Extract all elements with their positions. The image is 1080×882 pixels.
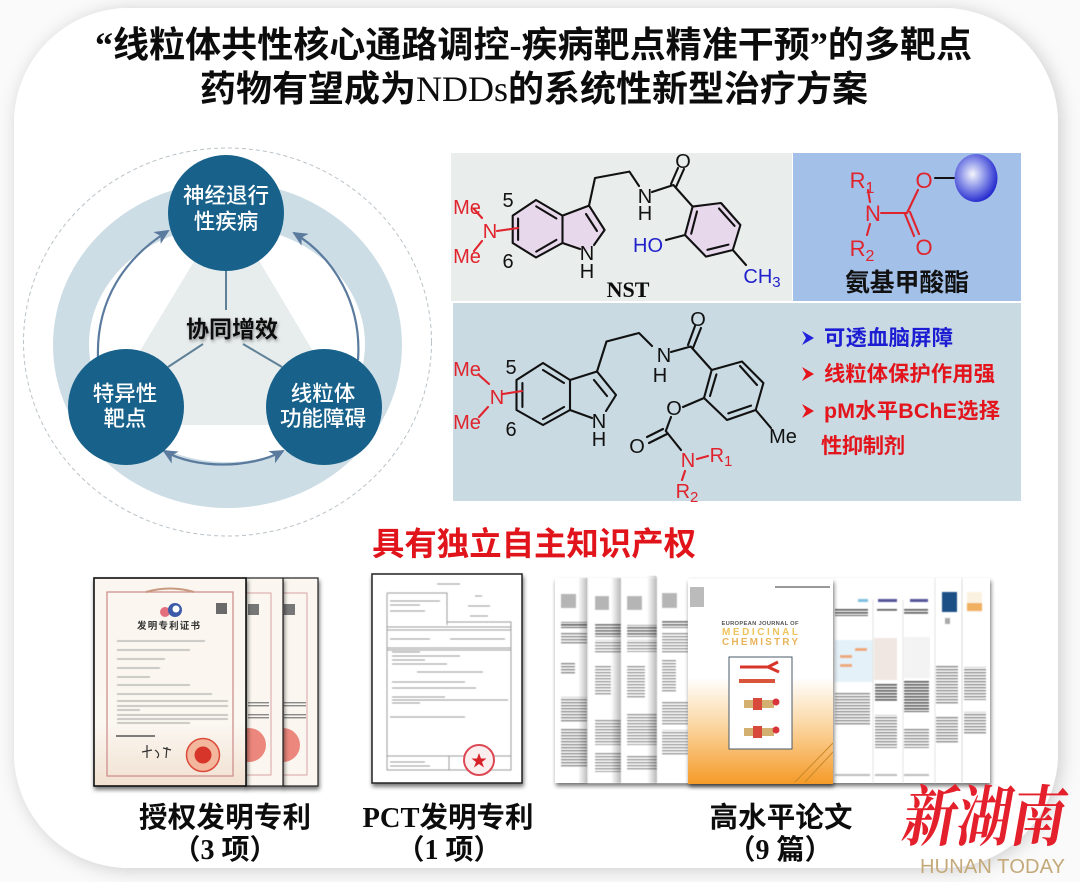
compound labels: 2: [690, 489, 698, 506]
panel: synergy cycle diagram: [24, 148, 432, 536]
label: high-level papers: [710, 802, 852, 866]
label: authorized patents: [139, 802, 311, 866]
NST labels: HO: [633, 235, 663, 257]
title: [95, 25, 972, 109]
diagonal corner stripe: [795, 743, 833, 782]
back sheets: [555, 578, 990, 783]
node: neurodegenerative disease: 神经退行: [183, 184, 269, 208]
journal name: EUROPEAN JOURNAL OF: [722, 621, 799, 627]
bullet: selective BChE inhibitor: pM水平BChE选择: [824, 399, 1001, 423]
label: authorized patents: 授权发明专利: [139, 802, 311, 834]
compound bonds: [516, 326, 771, 450]
label: high-level papers: （9 篇）: [727, 834, 833, 866]
bullet list: [802, 326, 1001, 458]
blue sphere: [954, 154, 998, 202]
node: specific target: 靶点: [103, 407, 147, 431]
bullet: crosses blood-brain barrier: 可透血脑屏障: [824, 326, 953, 350]
title line 1: “线粒体共性核心通路调控-疾病靶点精准干预”的多靶点: [95, 25, 972, 65]
panel: NST structure: [451, 151, 792, 302]
NST labels: N: [483, 221, 497, 243]
NST labels: Me: [453, 246, 481, 268]
node: mitochondrial dysfunction: 功能障碍: [280, 407, 366, 431]
bullet: mitochondrial protection: 线粒体保护作用强: [824, 362, 995, 386]
compound labels: O: [666, 398, 682, 420]
node: specific target: [68, 349, 184, 465]
journal name: MEDICINAL: [722, 627, 798, 638]
compound labels: Me: [453, 359, 481, 381]
NST labels: 3: [772, 274, 781, 291]
NST molecule red bonds: [474, 209, 518, 251]
journal papers fan: [555, 576, 990, 784]
NST labels: CH: [743, 266, 772, 288]
certificate 1 front: [94, 578, 246, 786]
NST molecule bonds: [513, 168, 746, 265]
watermark: Hunan Today logo: [897, 765, 1076, 878]
right sheets: [835, 578, 986, 783]
carbamate labels: R: [850, 236, 865, 261]
NST name: NST: [607, 277, 650, 302]
arrow: left arc up: [98, 231, 168, 358]
sheet 8: [935, 578, 958, 783]
carbamate labels: [850, 168, 933, 265]
compound labels: R: [710, 445, 724, 467]
NST labels: N: [638, 186, 652, 208]
label: PCT patents: [362, 802, 534, 866]
label: PCT patents: （1 项）: [396, 834, 502, 866]
QR code: [216, 603, 227, 614]
sheet 3: [611, 578, 657, 783]
NST labels: H: [580, 261, 594, 283]
NST labels: N: [580, 243, 594, 265]
compound labels: [453, 309, 797, 506]
compound labels: H: [592, 429, 606, 451]
journal cover: [688, 579, 833, 784]
bullet: selective BChE inhibitor: [802, 399, 1001, 458]
title line 2: 药物有望成为NDDs的系统性新型治疗方案: [200, 69, 868, 109]
NST labels: 6: [502, 251, 514, 273]
arrow: right arc up: [294, 233, 358, 360]
label: PCT patents: PCT发明专利: [362, 802, 534, 834]
carbamate bonds: [867, 178, 955, 236]
compound labels: R: [676, 481, 690, 503]
emblem: [160, 603, 182, 617]
node: neurodegenerative disease: 性疾病: [194, 210, 258, 234]
compound labels: 5: [505, 357, 517, 379]
node: neurodegenerative disease: [168, 155, 284, 271]
sheet 9: [962, 578, 986, 783]
NST labels: O: [675, 151, 691, 173]
journal name: [722, 621, 799, 648]
compound labels: 1: [724, 453, 732, 470]
sheet 5: [835, 599, 873, 776]
carbamate labels: R: [850, 168, 865, 193]
dashed outer ring: [24, 148, 432, 536]
sheet 4: [647, 576, 689, 783]
carbamate labels: O: [915, 235, 933, 260]
sheet 6: [873, 599, 897, 783]
form lines: [387, 584, 511, 770]
NST labels: [453, 151, 781, 291]
sheet 2: [578, 578, 621, 783]
logo characters: 新湖南: [897, 765, 1076, 860]
compound labels: N: [592, 411, 606, 433]
journal name: CHEMISTRY: [722, 637, 798, 648]
cover figure: [729, 657, 792, 749]
NST labels: 5: [502, 190, 514, 212]
NST labels: Me: [453, 197, 481, 219]
carbamate name: 氨基甲酸酯: [845, 269, 969, 297]
pink ring fills: [513, 200, 740, 258]
issue line: [775, 586, 830, 588]
sheet 1: [561, 594, 587, 768]
compound red bonds: [479, 375, 708, 480]
bullet: selective BChE inhibitor: 性抑制剂: [821, 434, 905, 458]
compound labels: Me: [769, 426, 797, 448]
compound labels: 6: [505, 419, 517, 441]
panel: carbamate: [793, 153, 1021, 301]
carbamate labels: O: [915, 168, 933, 193]
label: authorized patents: （3 项）: [172, 834, 278, 866]
patent certificates stack: [94, 578, 318, 786]
compound labels: Me: [453, 412, 481, 434]
logo subtitle: HUNAN TODAY: [920, 856, 1065, 878]
compound labels: N: [657, 345, 671, 367]
grey centre triangle: [95, 207, 357, 425]
carbamate labels: 1: [865, 180, 874, 197]
light blue ring: [53, 182, 402, 508]
compound labels: H: [653, 365, 667, 387]
connector lines: [168, 266, 282, 367]
top ornament: [146, 588, 194, 592]
signature: [142, 745, 171, 758]
PCT patent document: [372, 574, 522, 783]
node: specific target: 特异性: [93, 382, 157, 406]
publisher logo: [690, 587, 704, 607]
compound labels: N: [490, 387, 504, 409]
NST labels: H: [638, 203, 652, 225]
panel: modified compound: [453, 303, 1021, 506]
node: mitochondrial dysfunction: [266, 349, 382, 465]
certificate heading: 发明专利证书: [137, 620, 200, 632]
red seal: [186, 738, 220, 772]
node: mitochondrial dysfunction: 线粒体: [291, 382, 356, 406]
compound labels: O: [690, 309, 706, 331]
compound labels: N: [681, 450, 695, 472]
carbamate labels: 2: [865, 248, 874, 265]
section heading: 具有独立自主知识产权: [372, 526, 696, 562]
compound labels: O: [629, 436, 645, 458]
certificate 3: [266, 578, 318, 786]
centre label: 协同增效: [186, 316, 278, 342]
sheet 7: [903, 599, 930, 783]
carbamate labels: N: [865, 201, 881, 226]
certificate 2: [232, 578, 283, 786]
arrow: bottom double arc: [164, 451, 283, 464]
PCT seal: [464, 745, 494, 775]
label: high-level papers: 高水平论文: [710, 802, 852, 834]
